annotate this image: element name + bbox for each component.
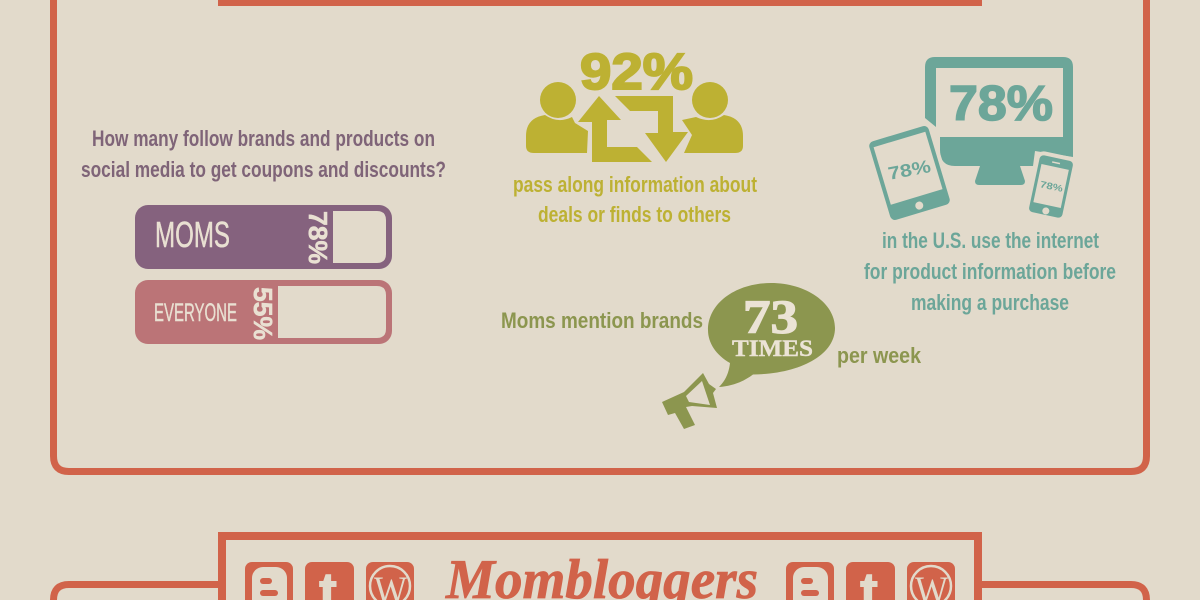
- panel: moms and brands frame: [54, 0, 1146, 472]
- number: 92%: 92%: [580, 43, 693, 100]
- icon: monitor: [925, 57, 1073, 185]
- icon: megaphone: [662, 373, 717, 429]
- heading banner: mombloggers: [222, 536, 978, 600]
- heading banner: top bar: [218, 0, 982, 6]
- number: 78% on monitor: 78%: [949, 77, 1053, 131]
- bar chart: moms 78%: 78%: [303, 211, 333, 264]
- caption: pass along information about: [513, 172, 758, 197]
- speech bubble: [708, 283, 835, 387]
- bar chart: everyone 55%: [135, 280, 392, 344]
- caption: for product information before: [864, 259, 1116, 284]
- icon: two people exchanging arrows: [526, 82, 743, 162]
- bar chart: everyone 55%: EVERYONE: [154, 299, 237, 327]
- bar chart: moms 78%: [135, 205, 392, 269]
- text: per week: per week: [837, 343, 922, 368]
- stat: 78% devices: [864, 57, 1116, 315]
- text block: brands question: [81, 126, 446, 182]
- bar chart: everyone 55%: 55%: [248, 287, 278, 340]
- label: times: TIMES: [732, 336, 813, 361]
- icons: right social group: [786, 562, 955, 600]
- number: 73: 73: [743, 291, 798, 344]
- panel: momblogger frame: [54, 584, 1146, 600]
- bar chart: moms 78%: MOMS: [155, 214, 230, 255]
- icons: left social group: [245, 562, 414, 600]
- caption: [864, 228, 1116, 315]
- icon: phone: 78%: [1039, 179, 1064, 195]
- text block: brands question: social media to get coupons and discounts?: [81, 157, 446, 182]
- stat: moms mention brands 73 times per week: [501, 283, 922, 429]
- caption: deals or finds to others: [538, 202, 731, 227]
- icon: phone: [1026, 152, 1076, 221]
- caption: [513, 172, 758, 227]
- caption: in the U.S. use the internet: [882, 228, 1100, 253]
- stat: 92% pass along information: [513, 43, 758, 227]
- icon: tablet: [866, 122, 953, 224]
- text block: brands question: How many follow brands and products on: [92, 126, 435, 151]
- icon: tablet: 78%: [886, 156, 932, 184]
- caption: making a purchase: [911, 290, 1069, 315]
- text: moms mention brands: Moms mention brands: [501, 308, 703, 333]
